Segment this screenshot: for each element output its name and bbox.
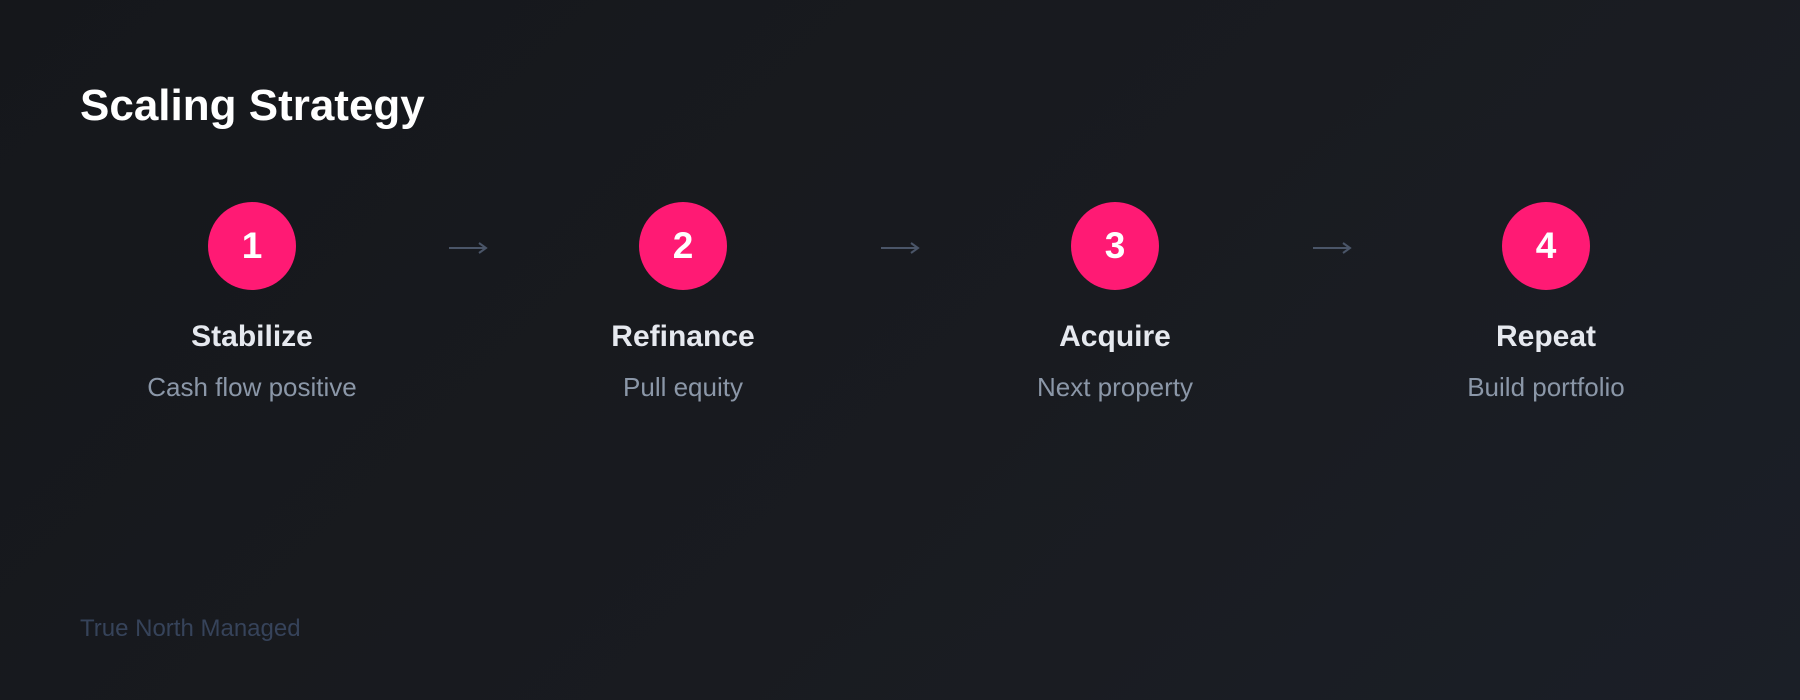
footer: True North Managed xyxy=(80,615,301,642)
circle 3: 3 xyxy=(1105,225,1125,266)
circle 3 xyxy=(1071,202,1159,290)
arrow 1 xyxy=(449,242,488,254)
subtitle: Pull equity xyxy=(623,372,743,402)
circle 1: 1 xyxy=(242,225,262,266)
label: Stabilize xyxy=(191,320,313,353)
label: Repeat xyxy=(1496,320,1596,353)
circle 1 xyxy=(208,202,296,290)
step 2: Refinance xyxy=(611,202,755,402)
step 1: Stabilize xyxy=(147,202,357,402)
circle 2 xyxy=(639,202,727,290)
subtitle: Next property xyxy=(1037,372,1193,402)
step 4: Repeat xyxy=(1467,202,1625,402)
arrow 2 xyxy=(881,242,920,254)
circle 4 xyxy=(1502,202,1590,290)
circle 4: 4 xyxy=(1536,225,1556,266)
title: Scaling Strategy xyxy=(80,81,425,130)
label: Refinance xyxy=(611,320,755,353)
arrow 3 xyxy=(1313,242,1352,254)
subtitle: Cash flow positive xyxy=(147,372,357,402)
subtitle: Build portfolio xyxy=(1467,372,1625,402)
label: Acquire xyxy=(1059,320,1171,353)
step 3: Acquire xyxy=(1037,202,1193,402)
circle 2: 2 xyxy=(673,225,693,266)
